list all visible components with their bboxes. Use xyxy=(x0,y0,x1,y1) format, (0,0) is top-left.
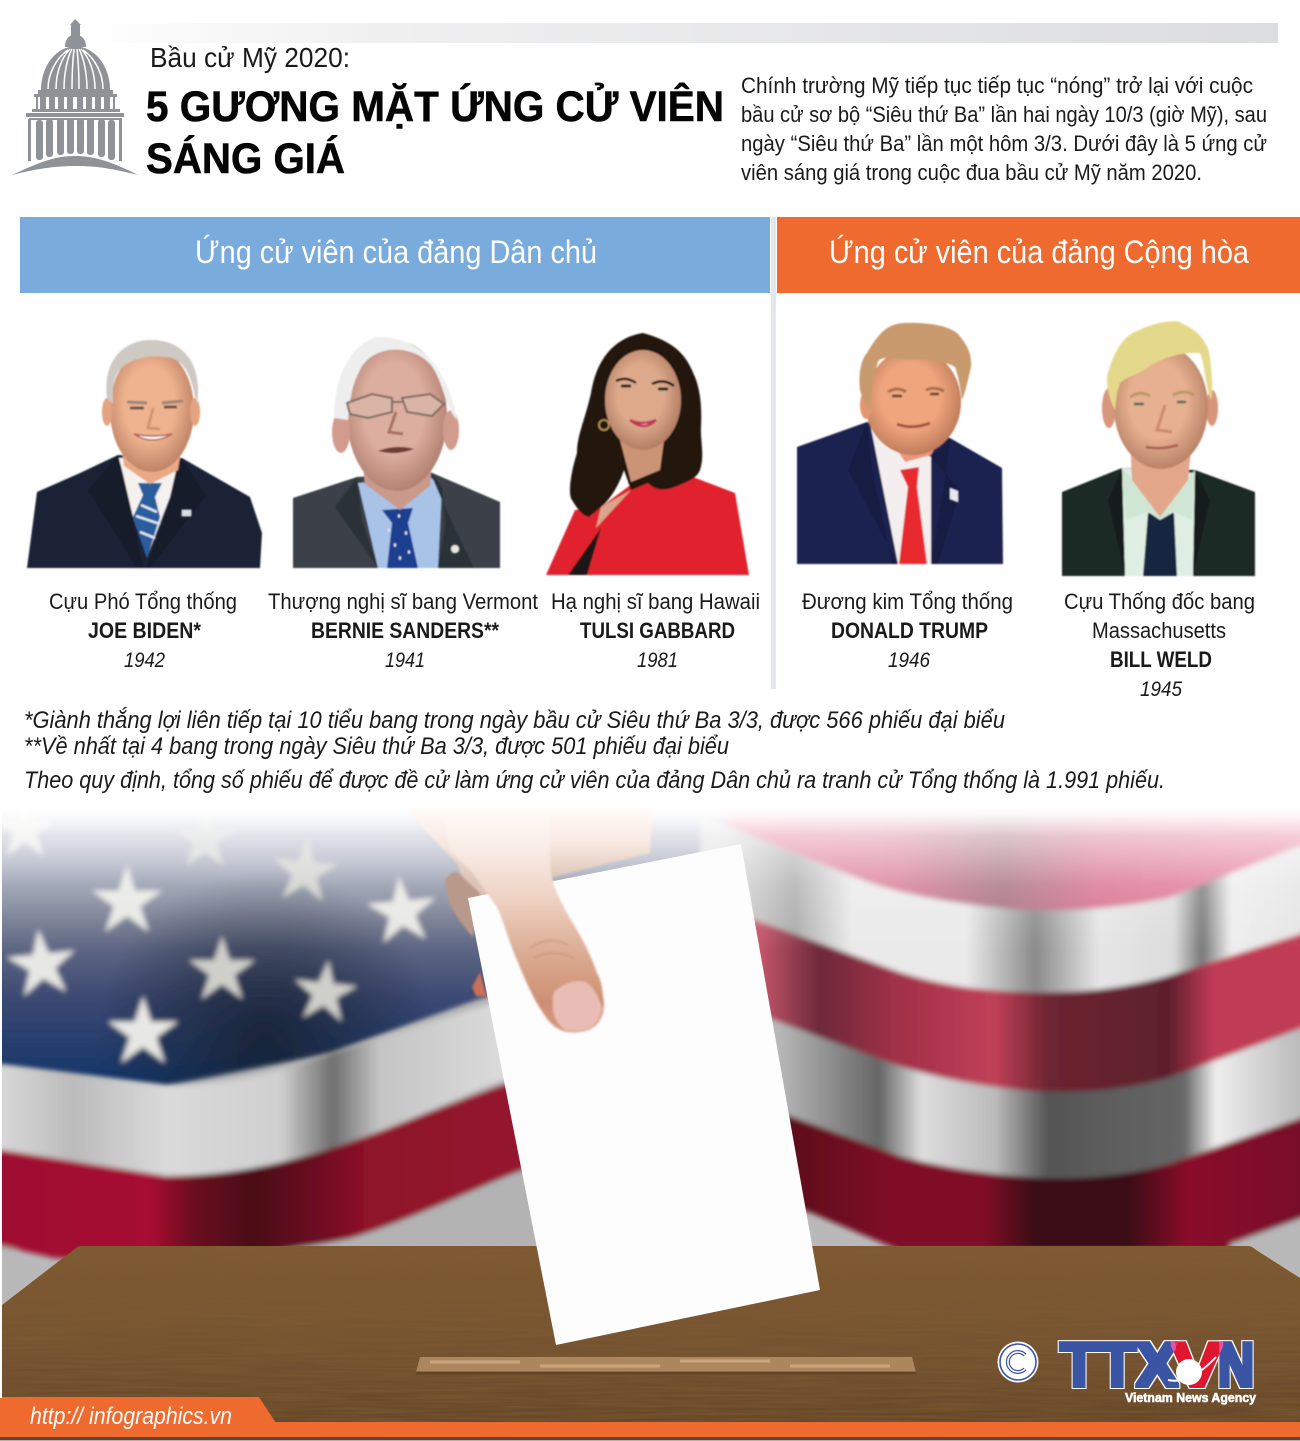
logo: TTXVN: N xyxy=(1218,1331,1254,1400)
illustration: flag and ballot box xyxy=(0,790,1300,1441)
url tab xyxy=(0,1397,276,1430)
top white fade xyxy=(2,808,1300,935)
logo: globe xyxy=(1168,1357,1216,1385)
intro paragraph: ngày “Siêu thứ Ba” lần một hôm 3/3. Dưới đây là 5 ứng cử xyxy=(741,131,1267,156)
url tab: http:// infographics.vn xyxy=(30,1403,232,1430)
caption: Tulsi Gabbard: Hạ nghị sĩ bang Hawaii xyxy=(551,589,760,614)
logo: TTXVN: TTX xyxy=(1060,1331,1178,1400)
portrait: Joe Biden xyxy=(27,340,262,568)
panel: Republican header: Ứng cử viên của đảng Cộng hòa xyxy=(829,234,1249,270)
caption: Joe Biden: Cựu Phó Tổng thống xyxy=(49,589,237,614)
logo: TTXVN: V xyxy=(1172,1331,1222,1400)
title line 2: SÁNG GIÁ xyxy=(146,135,345,183)
caption: Bill Weld xyxy=(1064,589,1255,701)
title line 1: 5 GƯƠNG MẶT ỨNG CỬ VIÊN xyxy=(146,82,724,131)
caption: Bernie Sanders: 1941 xyxy=(385,649,425,672)
caption: Tulsi Gabbard xyxy=(551,589,760,672)
ballot paper xyxy=(468,844,820,1345)
subtitle: Bầu cử Mỹ 2020: xyxy=(150,42,350,73)
caption: Joe Biden xyxy=(49,589,237,672)
portrait: Tulsi Gabbard xyxy=(546,333,749,575)
portrait: Bernie Sanders xyxy=(293,337,500,568)
caption: Bernie Sanders: BERNIE SANDERS** xyxy=(311,618,499,643)
intro paragraph: Chính trường Mỹ tiếp tục tiếp tục “nóng” trở lại với cuộc xyxy=(741,73,1253,98)
bottom orange bar xyxy=(0,1422,1300,1437)
thumb xyxy=(450,840,606,1034)
logo: copyright mark xyxy=(998,1342,1038,1382)
caption: Donald Trump: Đương kim Tổng thống xyxy=(802,589,1013,614)
caption: Bill Weld: BILL WELD xyxy=(1110,647,1212,672)
flag stripes right xyxy=(698,818,1300,1246)
flag canton with stars xyxy=(2,822,698,1088)
caption: Donald Trump xyxy=(802,589,1013,672)
panel: Republican header xyxy=(777,217,1300,293)
flag stripes left xyxy=(2,997,522,1262)
caption: Bernie Sanders xyxy=(268,589,538,672)
hand behind ballot xyxy=(407,808,653,997)
footnotes: *Giành thắng lợi liên tiếp tại 10 tiểu bang trong ngày bầu cử Siêu thứ Ba 3/3, được 566 phiếu đại biểu xyxy=(24,707,1005,734)
caption: Bill Weld: Massachusetts xyxy=(1092,618,1226,643)
palm and fingers xyxy=(418,816,652,896)
caption: Donald Trump: DONALD TRUMP xyxy=(831,618,988,643)
panel: Democratic header xyxy=(20,217,770,293)
caption: Joe Biden: JOE BIDEN* xyxy=(88,618,201,643)
intro paragraph: viên sáng giá trong cuộc đua bầu cử Mỹ năm 2020. xyxy=(741,160,1202,185)
flag backdrop xyxy=(2,996,897,1305)
footnotes: **Về nhất tại 4 bang trong ngày Siêu thứ Ba 3/3, được 501 phiếu đại biểu xyxy=(24,733,729,760)
logo: TTXVN xyxy=(1058,1340,1254,1389)
title block xyxy=(146,42,724,183)
caption: Tulsi Gabbard: TULSI GABBARD xyxy=(580,618,735,643)
caption: Joe Biden: 1942 xyxy=(124,649,165,672)
caption: Bill Weld: 1945 xyxy=(1140,678,1182,701)
caption: Bernie Sanders: Thượng nghị sĩ bang Vermont xyxy=(268,589,538,614)
portrait: Donald Trump xyxy=(797,323,1003,564)
panel: Democratic header: Ứng cử viên của đảng Dân chủ xyxy=(195,234,597,270)
caption: Donald Trump: 1946 xyxy=(888,649,930,672)
caption: Tulsi Gabbard: 1981 xyxy=(637,649,678,672)
footnotes: Theo quy định, tổng số phiếu để được đề cử làm ứng cử viên của đảng Dân chủ ra tranh cử Tổng thống là 1.991 phiếu. xyxy=(24,767,1165,794)
portrait: Bill Weld xyxy=(1062,321,1255,576)
logo: agency tagline: Vietnam News Agency xyxy=(1125,1390,1257,1405)
footnotes xyxy=(24,707,1165,794)
header band xyxy=(80,23,1278,43)
intro paragraph xyxy=(741,73,1267,185)
ballot box xyxy=(2,1246,1300,1441)
ballot slot xyxy=(416,1357,916,1372)
icon: capitol building xyxy=(12,19,138,175)
caption: Bill Weld: Cựu Thống đốc bang xyxy=(1064,589,1255,614)
